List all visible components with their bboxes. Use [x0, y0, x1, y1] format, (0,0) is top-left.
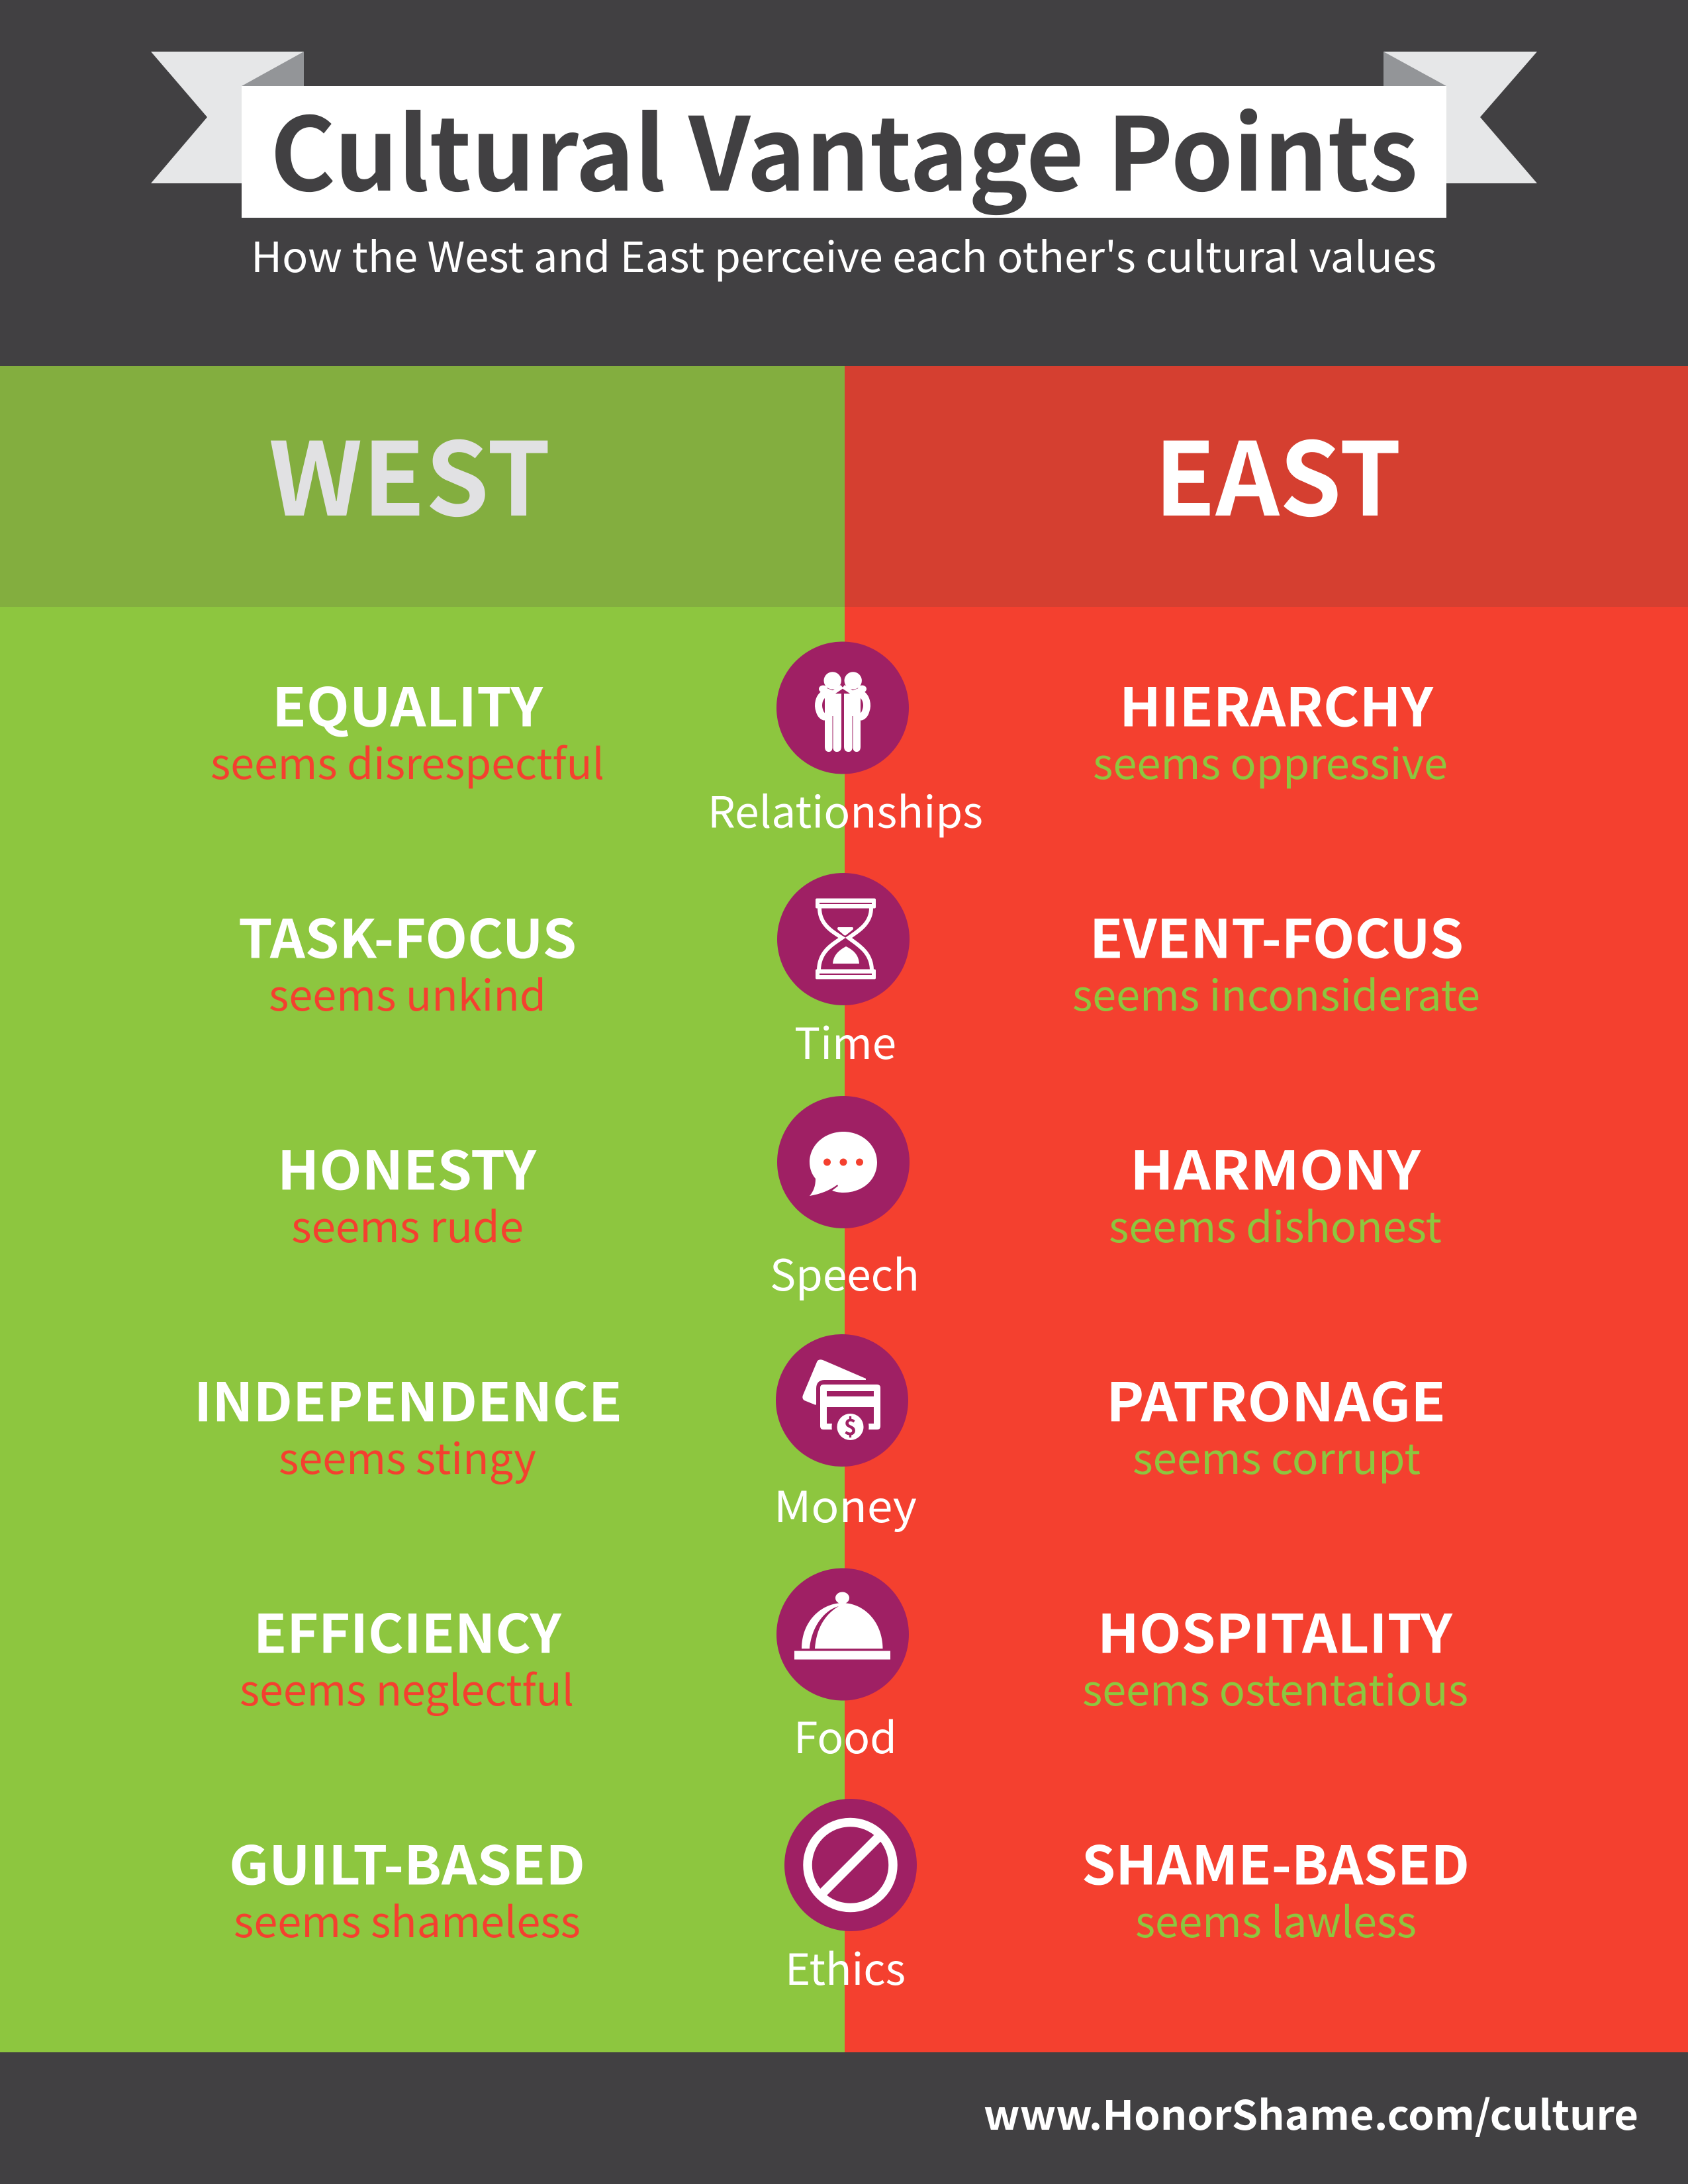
- value: HIERARCHY: [1119, 666, 1434, 743]
- panel: east column: [845, 366, 1688, 2052]
- value: GUILT-BASED: [229, 1824, 585, 1901]
- perception: seems dishonest: [1109, 1194, 1442, 1255]
- west row: efficiency: [240, 1592, 574, 1718]
- value: HONESTY: [277, 1129, 537, 1206]
- title banner: [151, 52, 1537, 220]
- banner plate: [242, 86, 1446, 218]
- west row: equality: [211, 666, 604, 792]
- east heading: EAST: [1154, 399, 1401, 545]
- icon: ethics: [784, 1799, 917, 1931]
- value: INDEPENDENCE: [194, 1361, 622, 1437]
- perception: seems shameless: [234, 1889, 581, 1950]
- left ribbon fold: [242, 52, 304, 86]
- east row: hierarchy: [1093, 666, 1448, 792]
- label: food: Food: [794, 1704, 897, 1766]
- footer band: [0, 2052, 1688, 2184]
- title: Cultural Vantage Points: [270, 74, 1418, 220]
- east row: event-focus: [1072, 897, 1480, 1023]
- value: HOSPITALITY: [1098, 1592, 1453, 1669]
- east row: hospitality: [1082, 1592, 1468, 1718]
- east row: shame-based: [1082, 1824, 1470, 1950]
- west header band: [0, 366, 845, 607]
- icon: speech: [777, 1096, 910, 1228]
- perception: seems lawless: [1135, 1889, 1417, 1950]
- east body: [845, 607, 1688, 2052]
- perception: seems oppressive: [1093, 731, 1448, 792]
- value: EVENT-FOCUS: [1090, 897, 1464, 974]
- left ribbon tail: [151, 52, 304, 183]
- label: time: Time: [794, 1009, 896, 1071]
- label: speech: Speech: [770, 1241, 919, 1303]
- label: money: Money: [774, 1473, 917, 1535]
- value: PATRONAGE: [1106, 1361, 1446, 1437]
- value: SHAME-BASED: [1082, 1824, 1470, 1901]
- icon: food: [776, 1569, 909, 1701]
- icon: money: [776, 1334, 908, 1467]
- right ribbon fold: [1383, 52, 1446, 86]
- west row: guilt-based: [229, 1824, 585, 1950]
- east row: patronage: [1106, 1361, 1446, 1486]
- label: relationships: Relationships: [708, 778, 983, 841]
- right ribbon tail: [1383, 52, 1537, 183]
- perception: seems corrupt: [1133, 1426, 1421, 1486]
- west row: independence: [194, 1361, 622, 1486]
- icon: time: [777, 873, 910, 1005]
- east row: harmony: [1109, 1129, 1442, 1255]
- value: EFFICIENCY: [254, 1592, 562, 1669]
- value: HARMONY: [1130, 1129, 1421, 1206]
- west body: [0, 607, 845, 2052]
- subtitle: How the West and East perceive each other's cultural values: [251, 224, 1436, 285]
- west heading: WEST: [269, 399, 551, 545]
- perception: seems inconsiderate: [1072, 962, 1480, 1023]
- label: ethics: Ethics: [785, 1935, 906, 1997]
- top header band: [0, 0, 1688, 366]
- perception: seems neglectful: [240, 1657, 574, 1718]
- value: TASK-FOCUS: [238, 897, 577, 974]
- perception: seems ostentatious: [1082, 1657, 1468, 1718]
- perception: seems disrespectful: [211, 731, 604, 792]
- perception: seems unkind: [269, 962, 546, 1023]
- west row: honesty: [277, 1129, 537, 1255]
- value: EQUALITY: [272, 666, 543, 743]
- perception: seems rude: [291, 1194, 524, 1255]
- footer url: www.HonorShame.com/culture: [984, 2083, 1638, 2142]
- panel: west column: [0, 366, 845, 2052]
- perception: seems stingy: [279, 1426, 536, 1486]
- west row: task-focus: [238, 897, 577, 1023]
- icon: money: $: [844, 1410, 857, 1441]
- icon: relationships: [776, 642, 909, 774]
- east header band: [845, 366, 1688, 607]
